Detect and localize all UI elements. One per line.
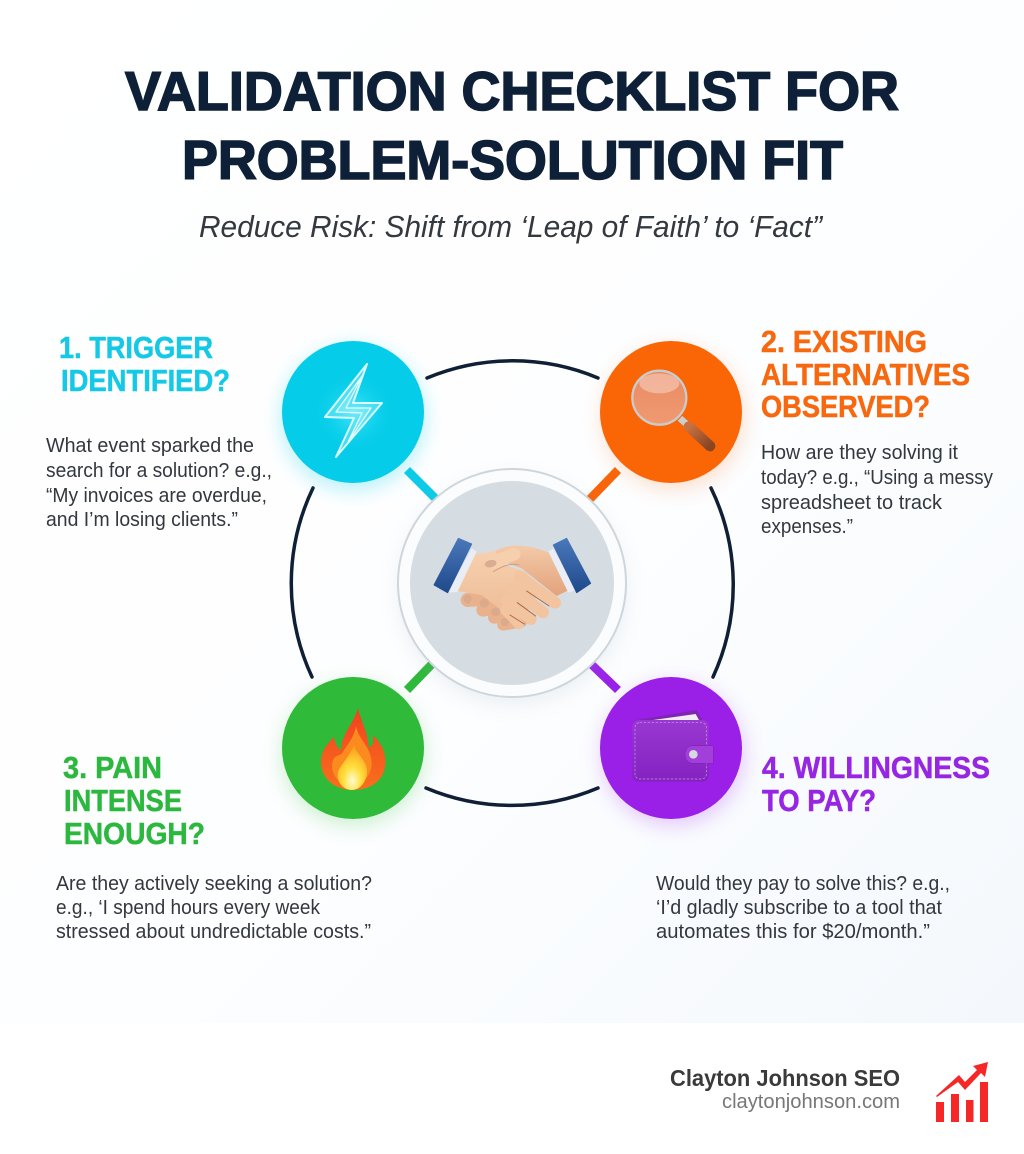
heading: willingness to pay — [762, 751, 990, 818]
panel: step 4 — [656, 751, 990, 943]
node 4: purple wallet — [600, 677, 744, 825]
text: step 1 body — [46, 434, 272, 531]
heading: existing alternatives observed — [761, 325, 970, 424]
heading: existing alternatives observed: OBSERVED? — [761, 390, 930, 424]
text: step 4 body: automates this for $20/month.” — [656, 920, 930, 943]
heading: pain intense enough: 3. PAIN — [63, 751, 162, 785]
heading: trigger identified: IDENTIFIED? — [61, 364, 230, 398]
heading: existing alternatives observed: ALTERNATIVES — [761, 358, 970, 392]
node 2: orange magnifier — [600, 341, 744, 489]
brand name: Clayton Johnson SEO — [670, 1065, 900, 1091]
connector: orange — [589, 470, 618, 500]
footer branding — [670, 1062, 988, 1122]
panel: step 3 — [56, 751, 372, 943]
heading: pain intense enough: INTENSE — [64, 784, 182, 818]
brand url: claytonjohnson.com — [722, 1091, 900, 1113]
heading: willingness to pay: 4. WILLINGNESS — [762, 751, 990, 785]
icon: red growth chart — [936, 1062, 988, 1122]
heading: willingness to pay: TO PAY? — [762, 784, 876, 818]
text: step 4 body: ‘I’d gladly subscribe to a tool that — [656, 896, 942, 919]
icon: handshake — [434, 538, 591, 626]
text: step 1 body: What event sparked the — [46, 434, 254, 457]
text: step 2 body — [761, 441, 994, 538]
icon: magnifying glass — [632, 371, 710, 446]
text: step 3 body — [56, 872, 372, 943]
text: step 2 body: today? e.g., “Using a messy — [761, 466, 994, 489]
heading: trigger identified: 1. TRIGGER — [59, 331, 213, 365]
heading: pain intense enough: ENOUGH? — [64, 817, 205, 851]
connector: green — [407, 663, 433, 690]
node 3: green flame — [282, 677, 424, 825]
title: PROBLEM-SOLUTION FIT — [182, 129, 843, 191]
title: VALIDATION CHECKLIST FOR — [125, 60, 899, 122]
text: step 4 body — [656, 872, 950, 943]
title — [125, 60, 899, 191]
text: step 1 body: search for a solution? e.g., — [46, 459, 272, 482]
panel: step 1 — [46, 331, 272, 531]
text: step 2 body: How are they solving it — [761, 441, 958, 464]
heading: existing alternatives observed: 2. EXISTING — [761, 325, 927, 359]
node 1: cyan lightning — [282, 341, 424, 489]
text: step 3 body: e.g., ‘I spend hours every week — [56, 896, 321, 919]
icon: lightning bolt — [325, 364, 382, 457]
text: step 3 body: stressed about undredictable costs.” — [56, 920, 371, 943]
text: step 1 body: “My invoices are overdue, — [46, 484, 267, 507]
connector: cyan — [407, 470, 437, 500]
text: step 3 body: Are they actively seeking a solution? — [56, 872, 372, 895]
heading: pain intense enough — [63, 751, 205, 851]
text: step 2 body: expenses.” — [761, 515, 853, 538]
text: step 4 body: Would they pay to solve this? e.g., — [656, 872, 950, 895]
connector: purple — [591, 664, 618, 690]
diagram: validation cycle — [282, 341, 744, 825]
icon: wallet — [632, 710, 713, 782]
outer ring arcs — [291, 361, 733, 805]
heading: trigger identified — [59, 331, 230, 398]
text: step 1 body: and I’m losing clients.” — [46, 508, 238, 531]
center hub: handshake — [398, 469, 626, 704]
text: step 2 body: spreadsheet to track — [761, 491, 943, 514]
subtitle: Reduce Risk: Shift from ‘Leap of Faith’ to ‘Fact” — [199, 209, 824, 244]
panel: step 2 — [761, 325, 994, 538]
icon: flame — [321, 708, 386, 790]
